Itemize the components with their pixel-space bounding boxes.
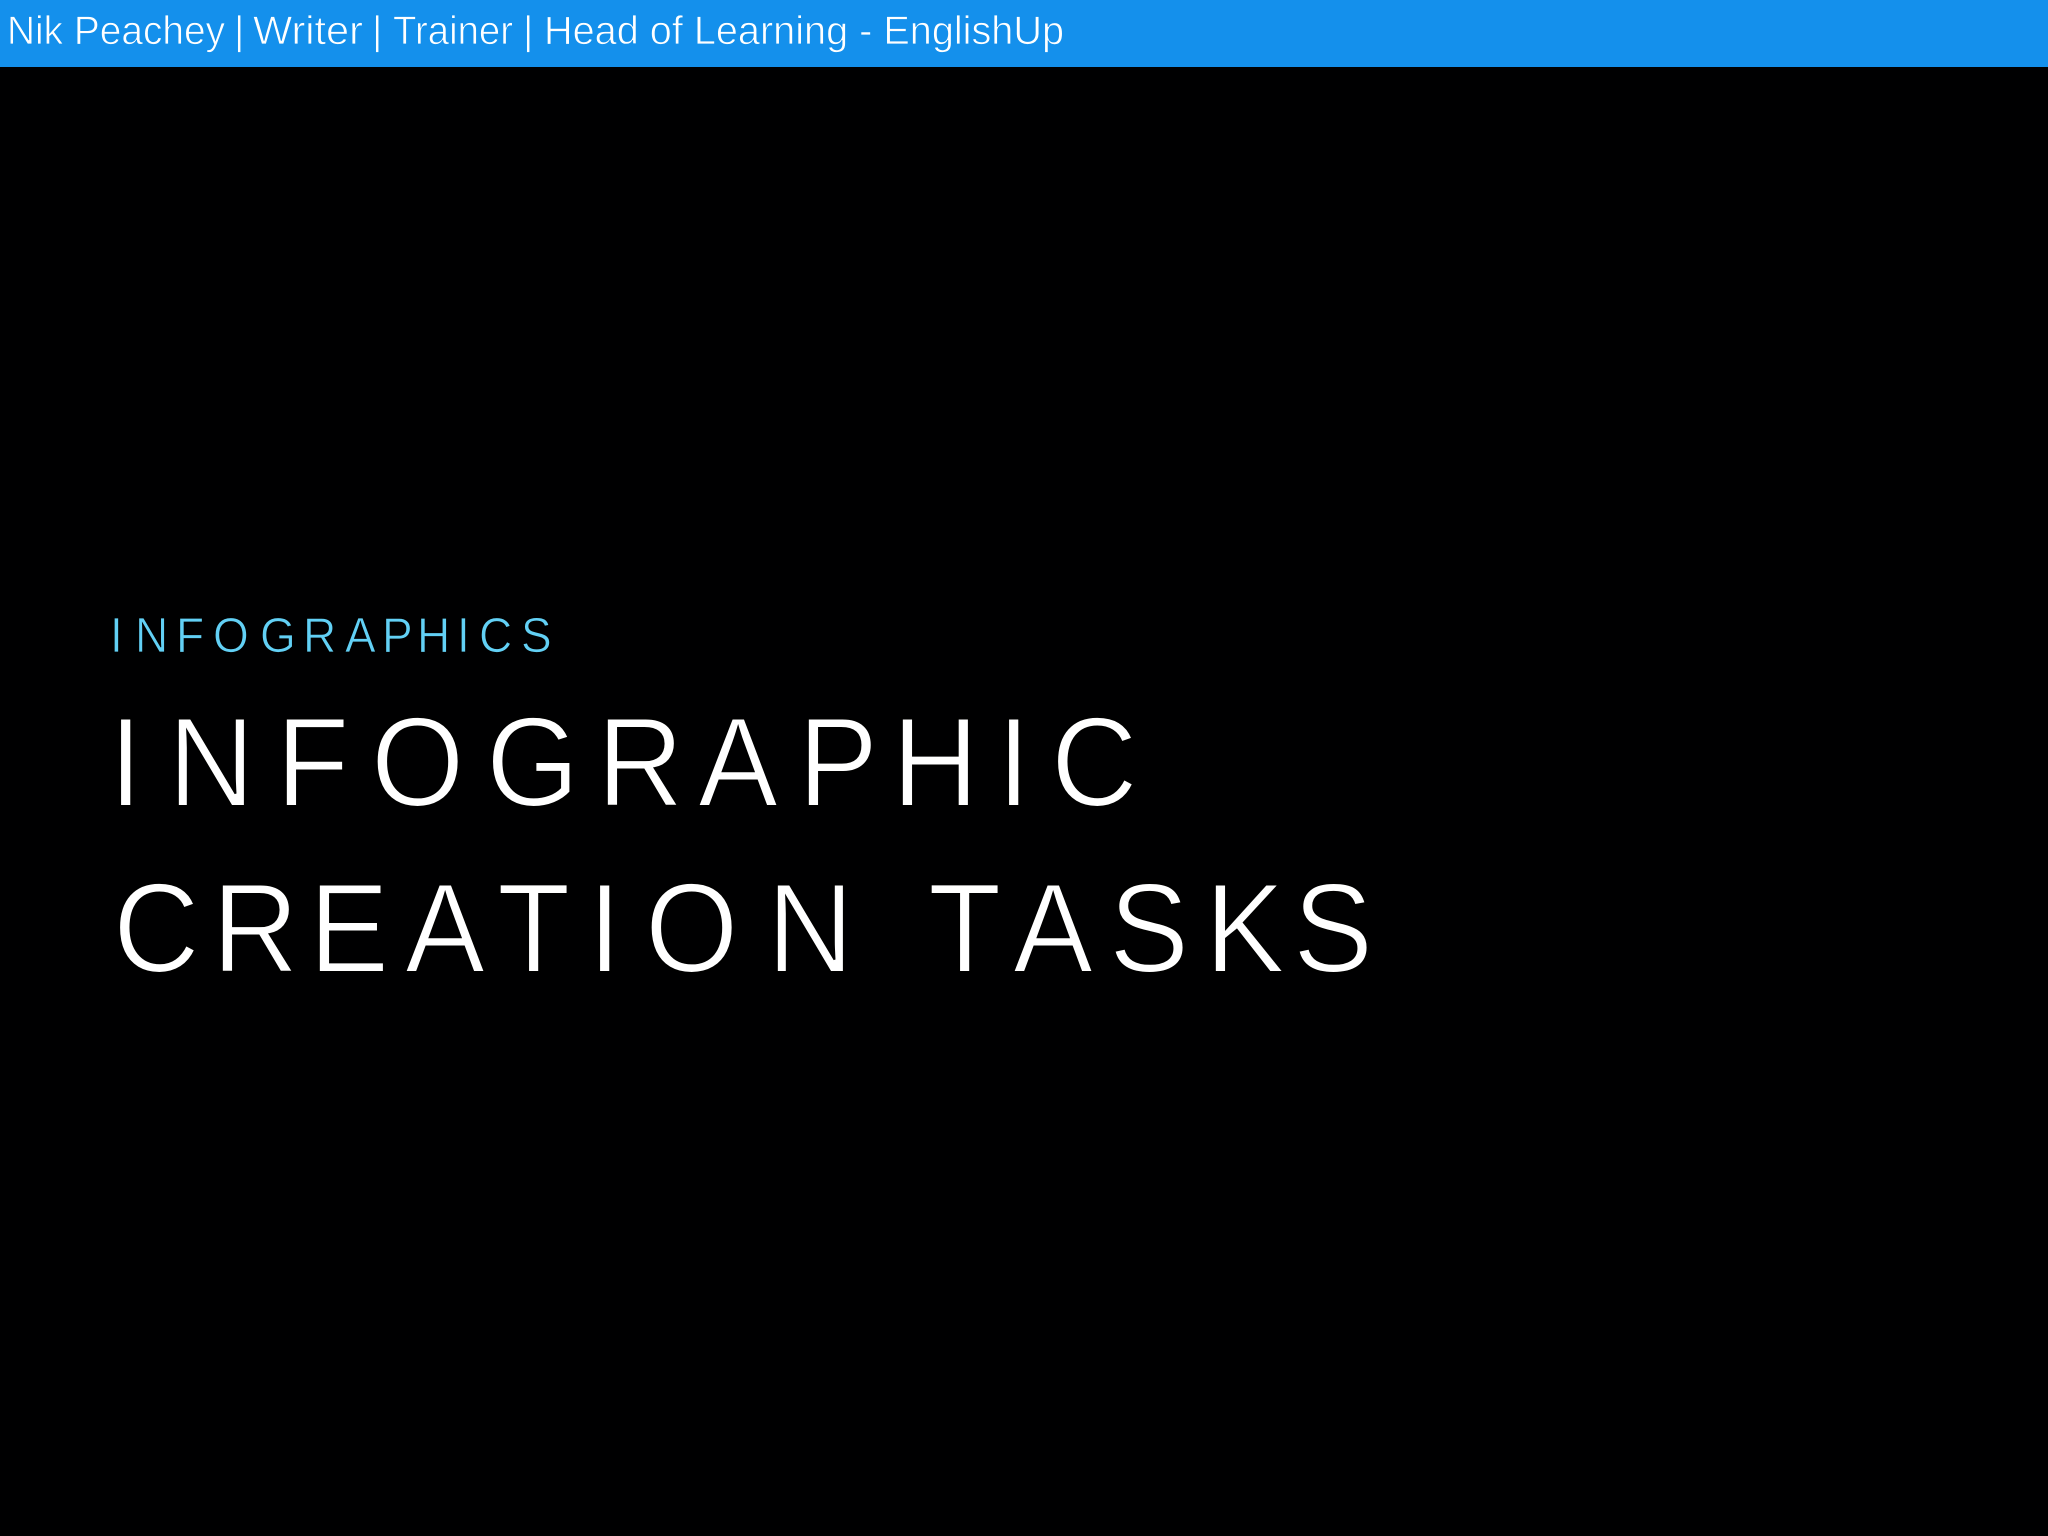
header bar [0,0,2048,67]
header text: | [234,9,244,53]
title line 1: INFOGRAPHIC [109,692,1138,834]
header text: Trainer [393,9,513,53]
header text: Writer [253,9,363,53]
header text: Nik Peachey [7,9,225,53]
main title [109,692,1373,1000]
header text: | [372,9,382,53]
title line 2: CREATION TASKS [113,858,1373,1000]
header text: Head of Learning - EnglishUp [544,9,1064,53]
header text: | [523,9,533,53]
section label: INFOGRAPHICS [110,609,552,663]
